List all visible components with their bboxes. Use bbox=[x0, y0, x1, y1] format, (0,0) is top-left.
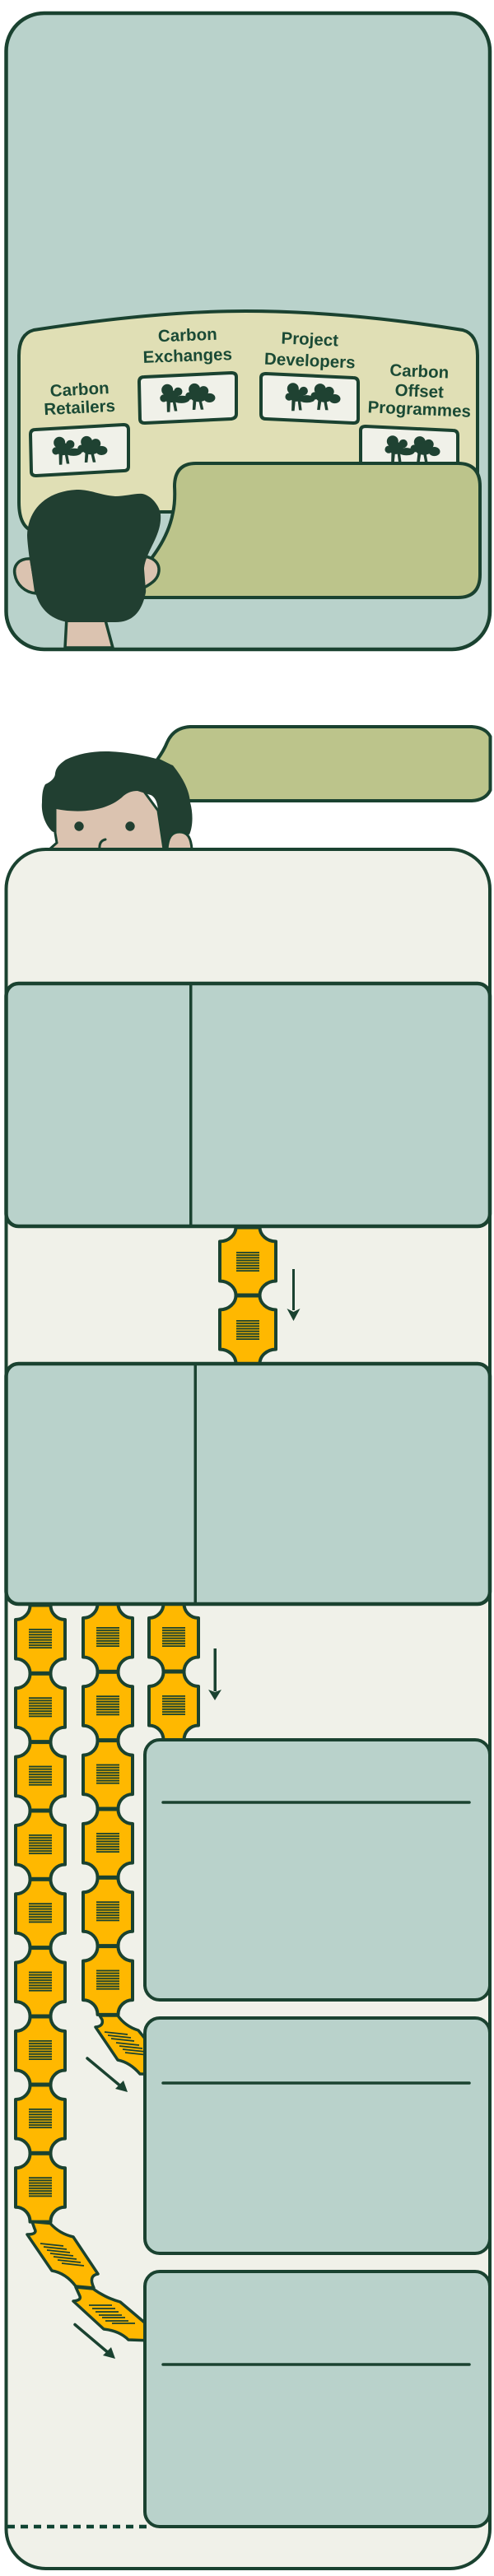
sign: Project Developers bbox=[261, 329, 358, 423]
sign: Carbon Exchanges: Exchanges bbox=[142, 345, 232, 367]
panel: first row split card bbox=[7, 983, 490, 1226]
tickets: column between rows bbox=[220, 1225, 276, 1364]
panel: right card two bbox=[145, 2018, 490, 2253]
speech bubble: second olive bbox=[157, 727, 491, 801]
tickets: column B bbox=[83, 1602, 152, 2074]
sign: Carbon Offset Programmes bbox=[361, 360, 471, 486]
sign: Carbon Offset Programmes: Offset bbox=[394, 381, 445, 402]
sign: Project Developers: Project bbox=[281, 329, 339, 351]
sign: Carbon Retailers bbox=[30, 379, 128, 476]
arrow: diagonal right of column B bbox=[87, 2058, 128, 2092]
panel: right card one bbox=[145, 1740, 490, 2000]
dashed baseline bbox=[7, 2525, 148, 2528]
sign: Carbon Exchanges: Carbon bbox=[158, 325, 217, 346]
sign: Project Developers: Developers bbox=[264, 350, 356, 372]
panel: main cream background bbox=[7, 849, 490, 2569]
panel: top teal scene bbox=[7, 13, 490, 649]
sign: Carbon Offset Programmes: Programmes bbox=[367, 398, 471, 421]
sign: Carbon Exchanges bbox=[139, 325, 236, 423]
panel: right card three bbox=[145, 2271, 490, 2527]
figure: person peeking over panel bbox=[42, 751, 193, 849]
panel: second row split card bbox=[7, 1364, 490, 1604]
ticket: tilted A2 bbox=[73, 2287, 152, 2341]
arrow: down between rows bbox=[287, 1269, 300, 1321]
arrow: diagonal right of column A bbox=[75, 2324, 115, 2359]
tickets: column C bbox=[149, 1602, 198, 1740]
arrow: down beside column C bbox=[208, 1648, 221, 1700]
sign: Carbon Retailers: Carbon bbox=[49, 379, 110, 401]
ticket: tilted B bbox=[96, 2016, 152, 2074]
board: carbon market stakeholders bbox=[19, 311, 478, 529]
speech bubble: top olive bbox=[140, 463, 480, 598]
sign: Carbon Retailers: Retailers bbox=[44, 397, 116, 419]
ticket: tilted A1 bbox=[27, 2222, 98, 2288]
sign: Carbon Offset Programmes: Carbon bbox=[389, 360, 450, 383]
tickets: column A bbox=[16, 1603, 152, 2341]
figure: person seen from behind bbox=[15, 490, 161, 648]
